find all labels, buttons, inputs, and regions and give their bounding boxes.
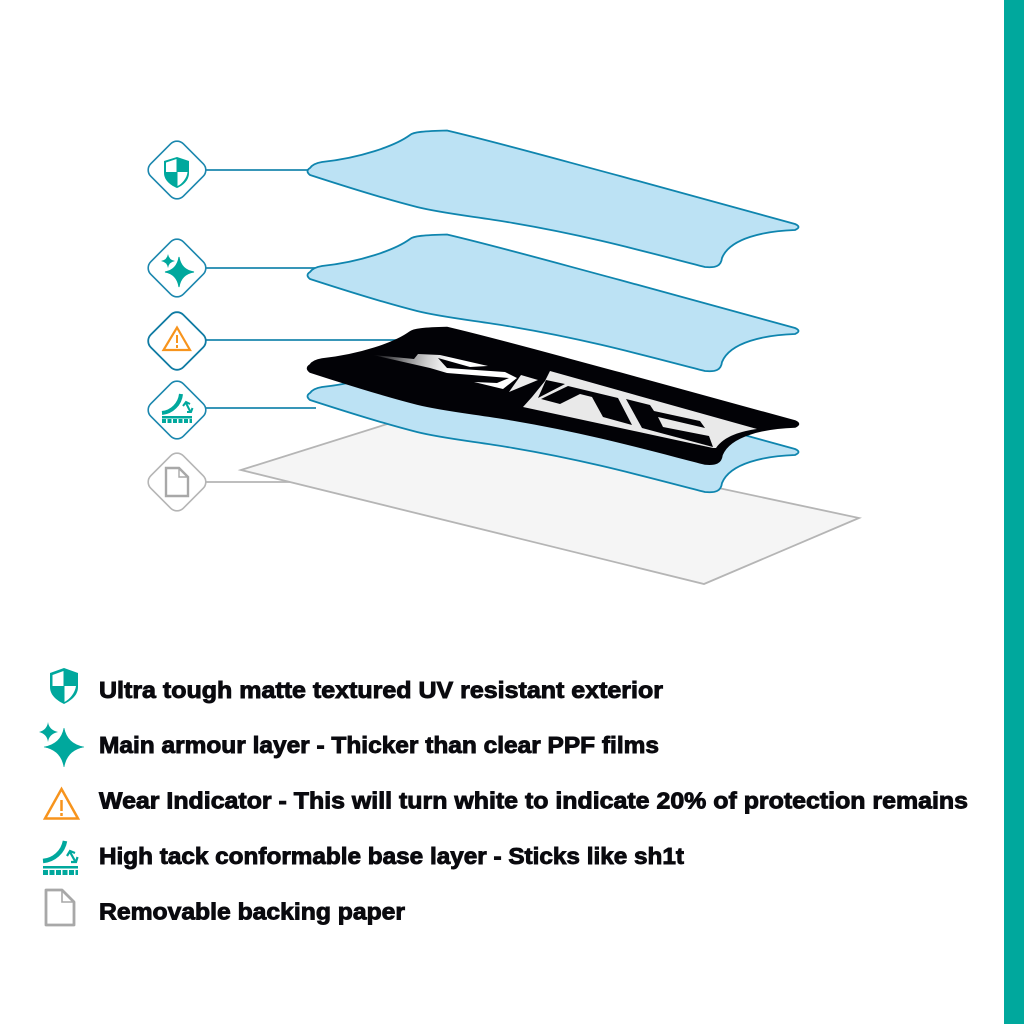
diagram icon: tack — [144, 377, 210, 443]
connector lines — [206, 170, 412, 482]
diagram icon: shield — [144, 137, 210, 203]
layer: main armour — [308, 234, 798, 371]
legend text 5: Removable backing paper — [99, 898, 405, 924]
legend text 3: Wear Indicator - This will turn white to indicate 20% of protection remains — [99, 788, 968, 814]
legend text 1: Ultra tough matte textured UV resistant exterior — [99, 677, 663, 703]
legend text 2: Main armour layer - Thicker than clear PPF films — [99, 732, 659, 758]
layer: base layer — [308, 356, 798, 492]
layer: backing paper — [241, 420, 859, 584]
layer: matte exterior — [308, 130, 798, 267]
diagram icon: sparkle — [144, 235, 210, 301]
legend icon: shield — [50, 668, 78, 704]
layer: black wear indicator with logo — [308, 328, 798, 464]
legend text 4: High tack conformable base layer - Sticks like sh1t — [99, 843, 684, 869]
diagram icon: paper — [144, 449, 210, 515]
legend icon: tack — [43, 841, 78, 872]
legend icon: warning — [45, 789, 78, 818]
legend icon: sparkle — [39, 722, 84, 767]
legend icon: paper — [46, 890, 74, 925]
diagram icon: warning — [144, 308, 210, 374]
teal side bar — [1004, 0, 1024, 1024]
